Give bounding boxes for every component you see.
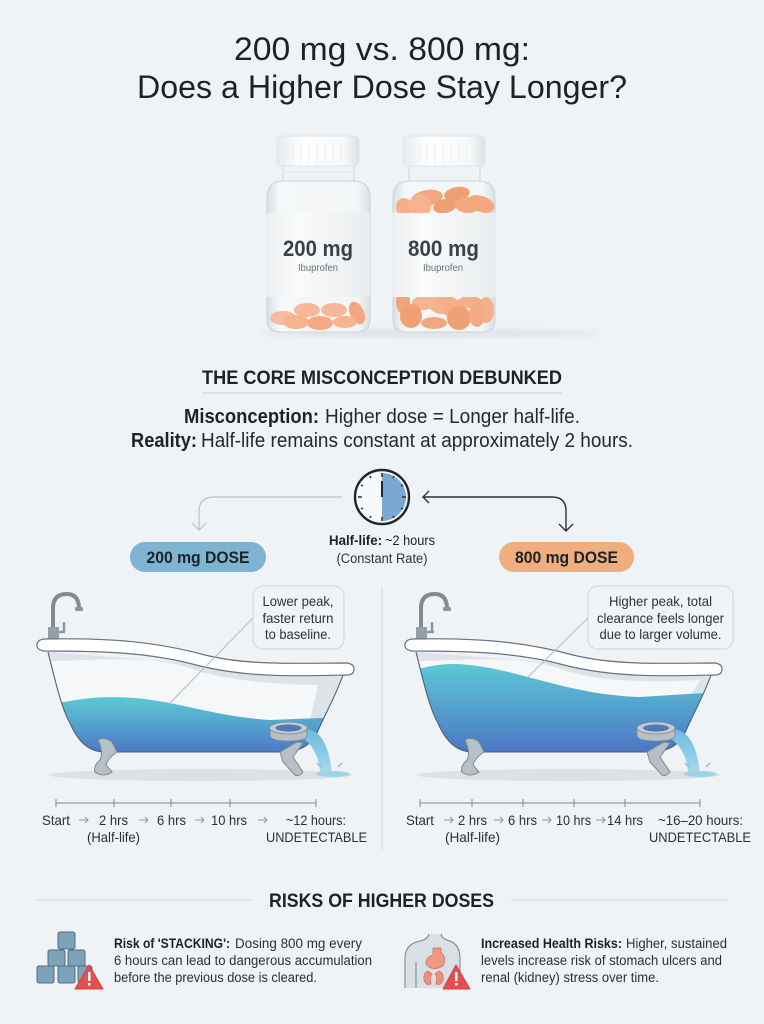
text block: misconception and reality: Higher dose = Longer half-life. xyxy=(325,406,580,428)
callout: due to larger volume. xyxy=(600,626,722,642)
drain and outflow xyxy=(270,722,350,777)
illustration: pill bottles xyxy=(260,136,600,338)
text block: health risks: Increased Health Risks: xyxy=(481,936,622,951)
text block: stacking risk: Dosing 800 mg every xyxy=(235,936,362,951)
label: half-life rate xyxy=(329,533,435,566)
faucet xyxy=(416,594,451,639)
timeline: (Half-life) xyxy=(87,829,140,845)
icon: half-life clock xyxy=(355,470,409,524)
panel: 800 mg bathtub xyxy=(405,586,751,845)
label: half-life rate: Half-life: xyxy=(329,533,382,548)
timeline: UNDETECTABLE xyxy=(649,829,751,845)
arrow: 800 mg and clock xyxy=(423,491,573,531)
title xyxy=(137,31,627,105)
tub rim xyxy=(405,639,722,676)
timeline: 6 hrs xyxy=(508,812,537,828)
pill: 800 mg dose xyxy=(499,542,634,572)
text block: health risks xyxy=(481,936,727,985)
text block: stacking risk: Risk of 'STACKING': xyxy=(114,936,230,951)
pills: full amount xyxy=(396,185,497,330)
text block: stacking risk: 6 hours can lead to dangerous accumulation xyxy=(114,953,372,968)
timeline xyxy=(406,799,751,845)
label: half-life rate: (Constant Rate) xyxy=(336,551,428,566)
callout: Lower peak, xyxy=(262,593,334,609)
tub rim xyxy=(37,639,354,676)
callout: clearance feels longer xyxy=(597,610,724,626)
callout xyxy=(527,586,733,678)
text block: misconception and reality: Half-life remains constant at approximately 2 hours. xyxy=(201,430,633,452)
pill: 200 mg dose: 200 mg DOSE xyxy=(146,548,250,567)
text block: misconception and reality xyxy=(131,406,633,452)
tub feet xyxy=(462,738,670,776)
text block: misconception and reality: Misconception: xyxy=(184,406,319,428)
timeline: 14 hrs xyxy=(607,812,643,828)
faucet xyxy=(48,594,83,639)
bottle: 800 mg: Ibuprofen xyxy=(423,262,463,274)
heading: risks of higher doses: RISKS OF HIGHER DOSES xyxy=(269,891,494,912)
title: Does a Higher Dose Stay Longer? xyxy=(137,69,627,105)
icon: stacked doses warning xyxy=(37,932,103,989)
timeline: 2 hrs xyxy=(458,812,487,828)
timeline: ~16–20 hours: xyxy=(658,812,743,828)
timeline: UNDETECTABLE xyxy=(266,829,367,845)
timeline: 10 hrs xyxy=(556,812,591,828)
heading: core misconception: THE CORE MISCONCEPTION DEBUNKED xyxy=(202,368,562,389)
bottle: 800 mg xyxy=(392,136,497,332)
timeline: 10 hrs xyxy=(211,812,247,828)
callout xyxy=(170,586,344,703)
text block: health risks: renal (kidney) stress over time. xyxy=(481,970,659,985)
text block: health risks: Higher, sustained xyxy=(626,936,727,951)
pills: small amount xyxy=(270,299,368,330)
icon: body with organs warning xyxy=(405,934,470,989)
drain and outflow xyxy=(637,722,717,777)
title: 200 mg vs. 800 mg: xyxy=(234,31,530,67)
timeline: ~12 hours: xyxy=(286,812,346,828)
bottle: 200 mg: Ibuprofen xyxy=(298,262,338,274)
timeline: Start xyxy=(42,812,70,828)
tub feet xyxy=(95,738,303,776)
timeline: Start xyxy=(406,812,434,828)
bottle: 200 mg xyxy=(266,136,370,332)
callout: faster return xyxy=(262,610,334,626)
label: half-life rate: ~2 hours xyxy=(385,533,435,548)
bottle: 800 mg: 800 mg xyxy=(408,236,479,261)
callout: Higher peak, total xyxy=(609,593,712,609)
panel: 200 mg bathtub xyxy=(37,586,367,845)
timeline: (Half-life) xyxy=(445,829,500,845)
arrow: clock to 200 mg xyxy=(192,497,342,530)
timeline: 2 hrs xyxy=(99,812,128,828)
bottle: 200 mg: 200 mg xyxy=(283,236,353,261)
tub body xyxy=(48,652,344,752)
text block: health risks: levels increase risk of stomach ulcers and xyxy=(481,953,722,968)
tub body xyxy=(416,652,712,752)
text block: stacking risk: before the previous dose is cleared. xyxy=(114,970,317,985)
timeline: 6 hrs xyxy=(157,812,186,828)
callout: to baseline. xyxy=(265,626,331,642)
timeline xyxy=(42,799,367,845)
pill: 200 mg dose xyxy=(130,542,266,572)
text block: stacking risk xyxy=(114,936,372,985)
text block: misconception and reality: Reality: xyxy=(131,430,197,452)
pill: 800 mg dose: 800 mg DOSE xyxy=(515,548,618,567)
